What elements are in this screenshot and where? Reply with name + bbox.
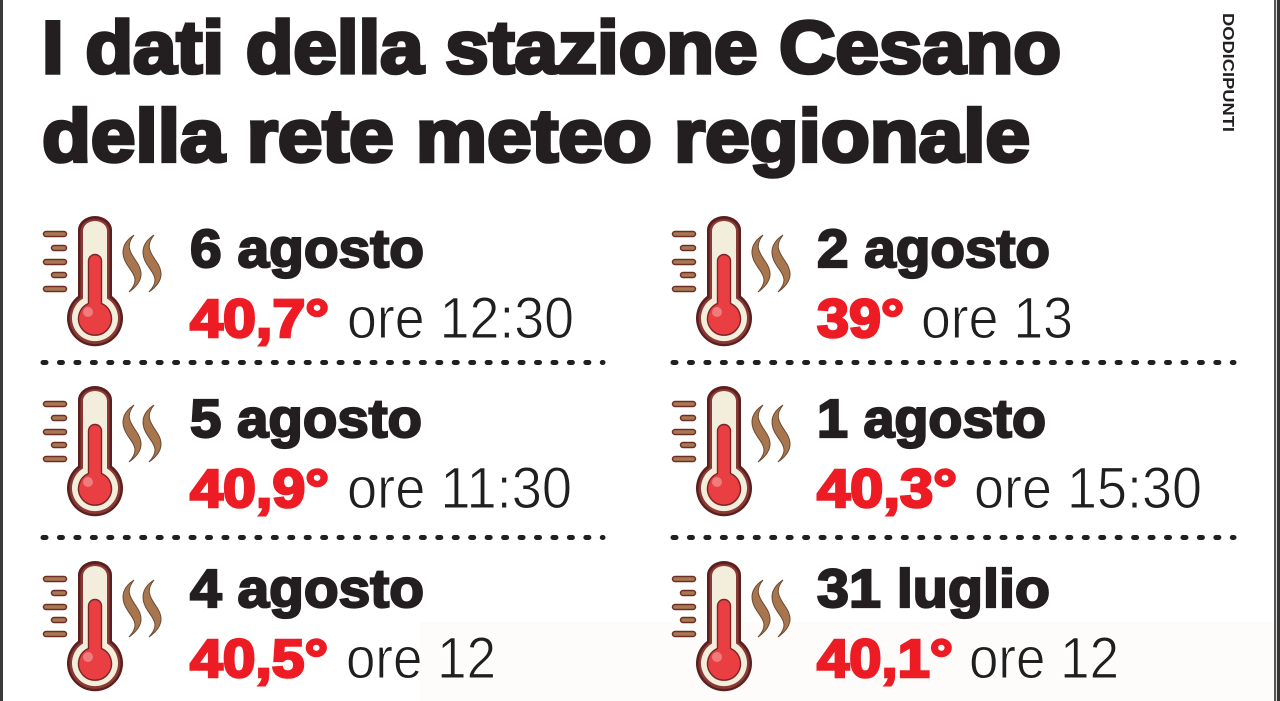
temperature: 40,9°: [190, 459, 329, 519]
left border: [0, 0, 3, 701]
icon: thermometer: [46, 561, 161, 691]
title: I dati della stazione Cesano: [42, 6, 1061, 89]
time: ore 15:30: [974, 456, 1202, 521]
time: ore 13: [921, 286, 1073, 351]
date: 1 agosto: [817, 389, 1046, 449]
time: ore 11:30: [347, 456, 572, 521]
date: 4 agosto: [190, 559, 424, 619]
date: 6 agosto: [190, 219, 424, 279]
date: 2 agosto: [817, 219, 1050, 279]
temperature: 40,3°: [817, 459, 957, 519]
reading: 31 luglio: [675, 559, 1119, 691]
icon: thermometer: [675, 386, 790, 516]
date: 31 luglio: [817, 559, 1050, 619]
icon: thermometer: [46, 216, 161, 346]
reading: 2 agosto: [675, 216, 1073, 351]
temperature: 39°: [817, 289, 904, 349]
time: ore 12: [346, 626, 496, 691]
bottom tinted band: [420, 622, 1275, 701]
right border: [1274, 0, 1280, 701]
temperature: 40,5°: [190, 629, 328, 689]
temperature: 40,7°: [190, 289, 329, 349]
reading: 6 agosto: [46, 216, 574, 351]
icon: thermometer: [675, 561, 790, 691]
credit: DODICIPUNTI: DODICIPUNTI: [1219, 13, 1236, 132]
temperature: 40,1°: [817, 629, 953, 689]
icon: thermometer: [46, 386, 161, 516]
time: ore 12:30: [347, 286, 574, 351]
date: 5 agosto: [190, 389, 422, 449]
reading: 5 agosto: [46, 386, 572, 521]
title: della rete meteo regionale: [42, 94, 1030, 178]
reading: 1 agosto: [675, 386, 1202, 521]
time: ore 12: [969, 626, 1119, 691]
title: [42, 6, 1061, 178]
reading: 4 agosto: [46, 559, 496, 691]
icon: thermometer: [675, 216, 790, 346]
